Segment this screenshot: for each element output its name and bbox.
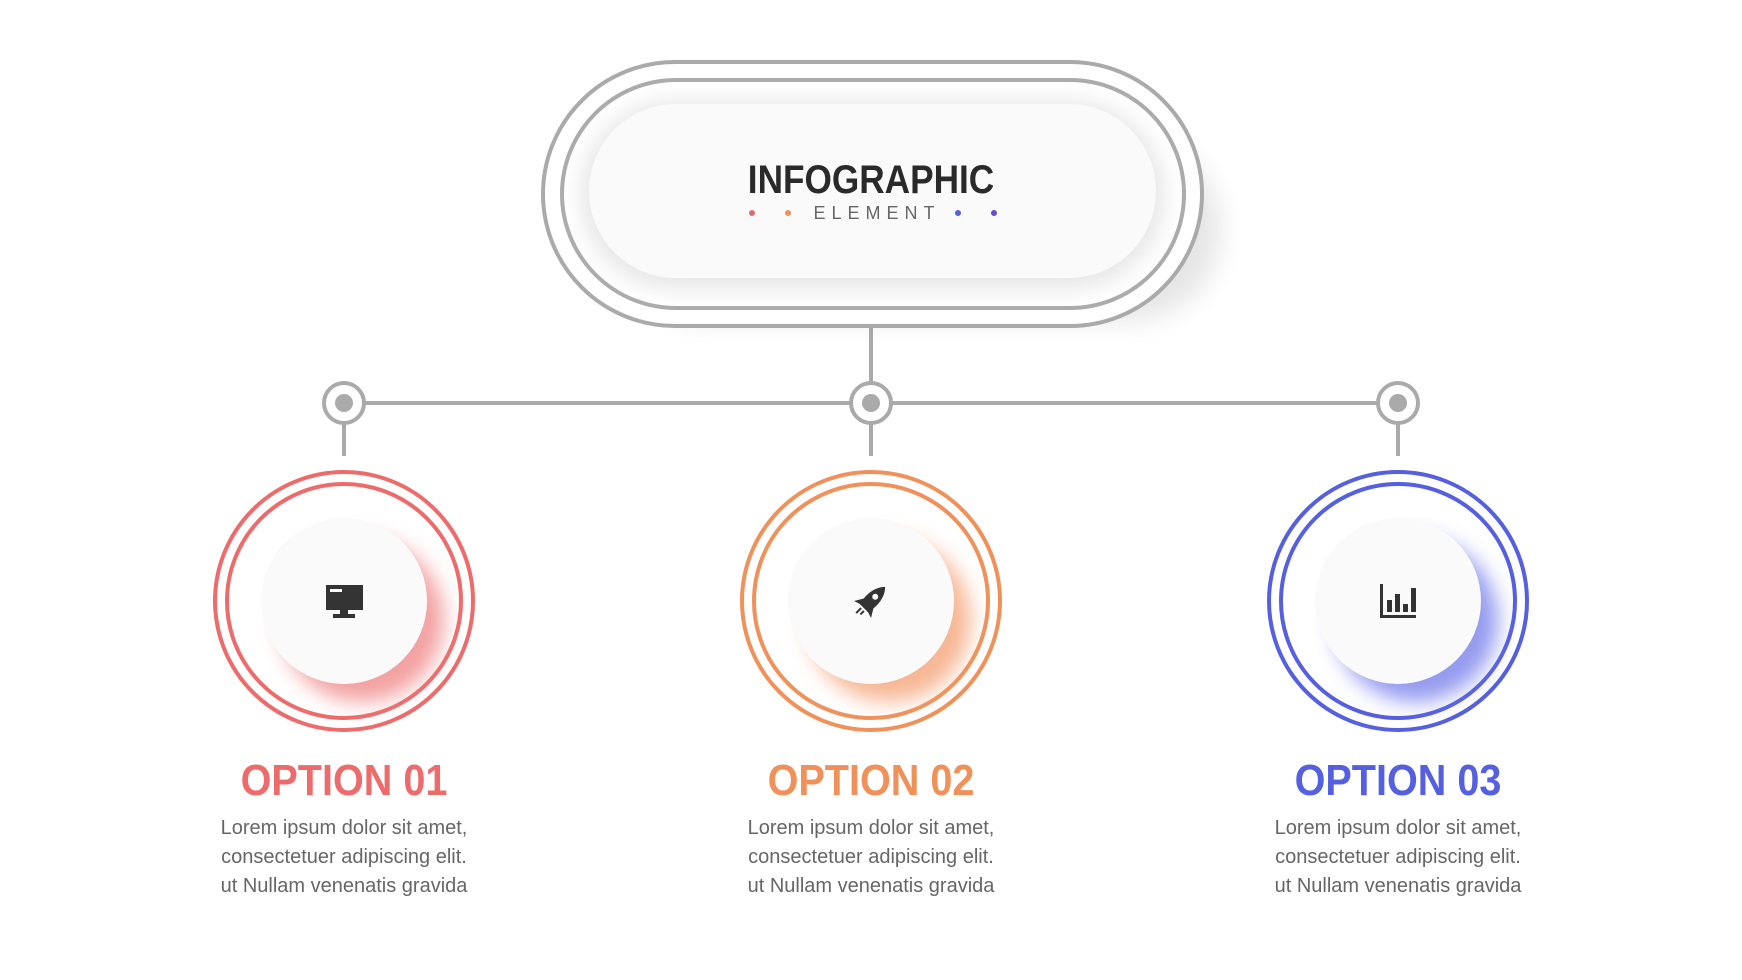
option 1 text: OPTION 01 <box>241 756 447 805</box>
option 3 text <box>1275 756 1522 897</box>
title pill <box>543 62 1220 326</box>
option 1 text <box>221 756 468 897</box>
node circles <box>324 383 1418 423</box>
option 3 text: consectetuer adipiscing elit. <box>1275 846 1521 868</box>
option 2 text: OPTION 02 <box>768 756 974 805</box>
icon: rocket <box>849 578 894 623</box>
option 3 text: OPTION 03 <box>1295 756 1501 805</box>
title: INFOGRAPHIC <box>748 158 994 202</box>
option 2 text: Lorem ipsum dolor sit amet, <box>748 817 994 839</box>
option 1 text: consectetuer adipiscing elit. <box>221 846 467 868</box>
icon: monitor <box>326 585 363 618</box>
option 3 text: Lorem ipsum dolor sit amet, <box>1275 817 1521 839</box>
option 1 text: Lorem ipsum dolor sit amet, <box>221 817 467 839</box>
icon: bar chart <box>1380 584 1416 618</box>
option 2 text <box>748 756 994 897</box>
connector lines <box>344 326 1398 456</box>
option 3 text: ut Nullam venenatis gravida <box>1275 875 1521 897</box>
subtitle: ELEMENT <box>813 203 941 223</box>
title dots <box>749 210 997 216</box>
option circles <box>215 472 473 730</box>
option 2 text: ut Nullam venenatis gravida <box>748 875 994 897</box>
option 2 text: consectetuer adipiscing elit. <box>748 846 994 868</box>
option 1 text: ut Nullam venenatis gravida <box>221 875 467 897</box>
